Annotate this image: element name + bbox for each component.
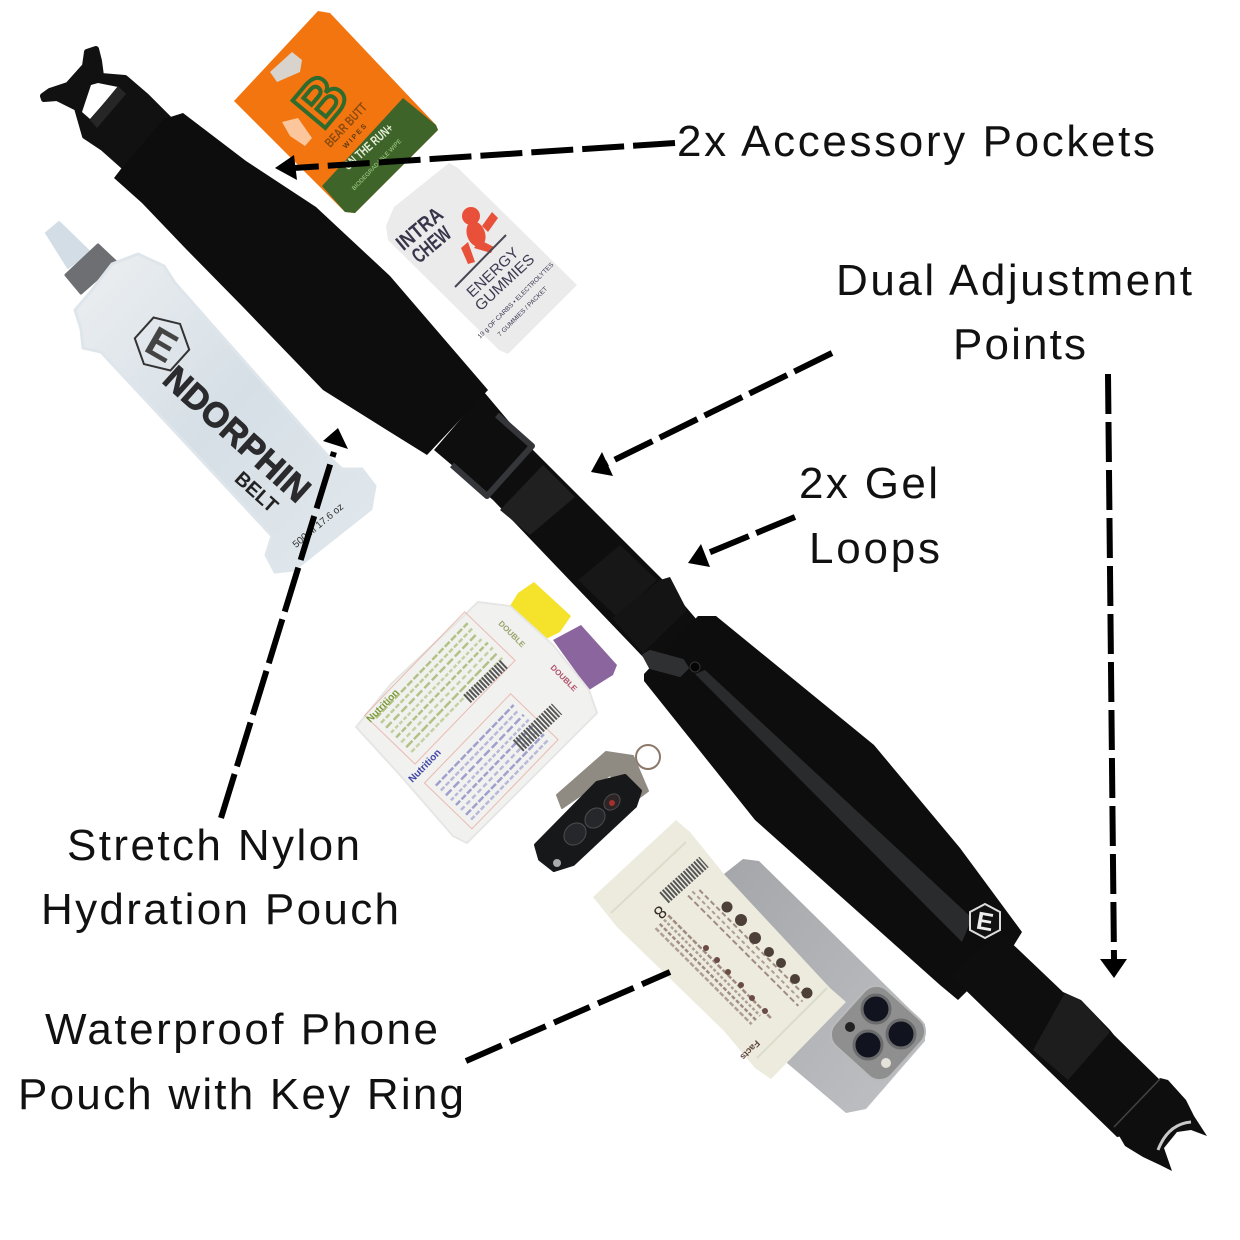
arrow: dual adjustment left: [591, 353, 832, 476]
label: dual adjustment points: [836, 256, 1192, 369]
purple tab: [553, 625, 617, 690]
line: phone pouch: [466, 972, 670, 1061]
lens one: [862, 995, 890, 1023]
label: phone pouch: [18, 1005, 464, 1119]
barcode: [664, 862, 704, 898]
product details: 19 g OF CARBS • ELECTROLYTES: [477, 261, 556, 340]
label: gel loops: [799, 459, 940, 573]
bottle logo: E: [138, 317, 186, 372]
zipper pull: [643, 651, 688, 676]
brand mark: B: [280, 61, 362, 140]
zipper slider: [690, 662, 700, 672]
bottle collar: [66, 245, 116, 293]
phone: [724, 859, 932, 1113]
packet green band: [322, 98, 438, 213]
bar nutrition heading: Facts: [738, 1038, 762, 1062]
lock button: [581, 804, 609, 832]
ingredient icons: [703, 945, 768, 1014]
label: dual adjustment points: Dual Adjustment: [836, 256, 1192, 305]
yellow tab: [510, 582, 571, 642]
electrolyte gel packets: [356, 582, 617, 843]
certification icons: [722, 902, 812, 998]
blue nutrition heading: Nutrition: [407, 747, 444, 785]
arrow: gel loops: [688, 517, 795, 567]
zipper tape: [695, 670, 972, 942]
gel loop two: [612, 577, 687, 653]
upper pouch: [114, 113, 488, 455]
fob release: [553, 859, 561, 867]
second barcode: [518, 709, 557, 746]
arrow: hydration pouch: [221, 428, 348, 818]
lens three: [854, 1031, 882, 1059]
hydration bottle: [46, 222, 375, 572]
arrow: accessory pockets: [275, 143, 675, 180]
packet body: [234, 11, 438, 213]
wrapper print: [656, 887, 807, 1038]
gel loop one: [578, 545, 657, 617]
camera module: [824, 979, 932, 1087]
energy gummies packet: [386, 163, 577, 354]
packet highlight: [282, 118, 312, 146]
adjustment buckle: [452, 415, 532, 496]
brand name second line: CHEW: [408, 222, 456, 268]
phone body: [724, 859, 925, 1113]
lower pouch: [644, 616, 1022, 1000]
mascot ground line: [455, 235, 506, 287]
lower strap: [950, 932, 1160, 1137]
fob body: [536, 776, 640, 870]
lower keeper: [1033, 993, 1110, 1080]
pouch logo: E: [974, 907, 995, 937]
product name second line: GUMMIES: [472, 251, 538, 315]
car key fob: [536, 745, 660, 870]
label: gel loops: Loops: [809, 524, 940, 573]
textured keeper: [500, 465, 575, 535]
bottle volume: 500ml 17.6 oz: [291, 502, 346, 550]
bottle body: [75, 254, 375, 572]
wrapper: [593, 820, 846, 1079]
end clip: [1114, 1078, 1207, 1171]
first barcode: [467, 664, 504, 699]
orange wipes packet: [234, 11, 438, 213]
key ring: [636, 745, 660, 769]
lidar: [845, 1022, 855, 1032]
label: phone pouch: Pouch with Key Ring: [18, 1070, 464, 1119]
panic button: [601, 791, 623, 813]
label: dual adjustment points: Points: [953, 320, 1086, 369]
label: hydration pouch: Stretch Nylon: [67, 821, 360, 870]
first packet name: DOUBLE: [497, 619, 527, 650]
running bear mascot: [461, 207, 498, 264]
label: phone pouch: Waterproof Phone: [45, 1005, 438, 1054]
top clip: [43, 49, 175, 172]
nutrition bar: [593, 820, 846, 1079]
brand name: BEAR BUTT: [321, 100, 370, 150]
blue nutrition panel: [424, 694, 558, 829]
second packet name: DOUBLE: [549, 663, 579, 694]
green nutrition panel: [365, 612, 515, 764]
label: hydration pouch: [41, 821, 399, 934]
product details second line: 7 GUMMIES / PACKET: [497, 286, 549, 338]
packet body: [356, 602, 597, 843]
packet body: [386, 163, 577, 354]
product name: ENERGY: [463, 244, 522, 301]
top seal: [611, 842, 686, 913]
arrow: dual adjustment down: [1100, 374, 1127, 978]
fragrance badge: [270, 52, 302, 82]
label: gel loops: 2x Gel: [799, 459, 938, 508]
bottle wordmark: NDORPHIN: [156, 359, 318, 510]
centre strap: [434, 392, 697, 675]
label: accessory pockets: 2x Accessory Pockets: [677, 117, 1155, 166]
keys: [557, 752, 648, 808]
label: hydration pouch: Hydration Pouch: [41, 885, 399, 934]
bottle sub-wordmark: BELT: [230, 468, 282, 517]
on the run label: ON THE RUN+: [340, 120, 396, 173]
pouch logo: [970, 904, 1000, 938]
bottle logo: [126, 308, 198, 380]
packet small print: BIODEGRADABLE WIPE: [351, 139, 403, 192]
brand number: 8: [650, 902, 671, 923]
brand descriptor: WIPES: [342, 122, 370, 150]
bottom seal: [757, 988, 827, 1058]
lens two: [887, 1020, 915, 1048]
unlock button: [559, 818, 591, 850]
bottle nozzle: [46, 222, 90, 268]
green nutrition heading: Nutrition: [365, 687, 402, 725]
brand name: INTRA: [392, 203, 448, 255]
flash: [881, 1058, 891, 1068]
